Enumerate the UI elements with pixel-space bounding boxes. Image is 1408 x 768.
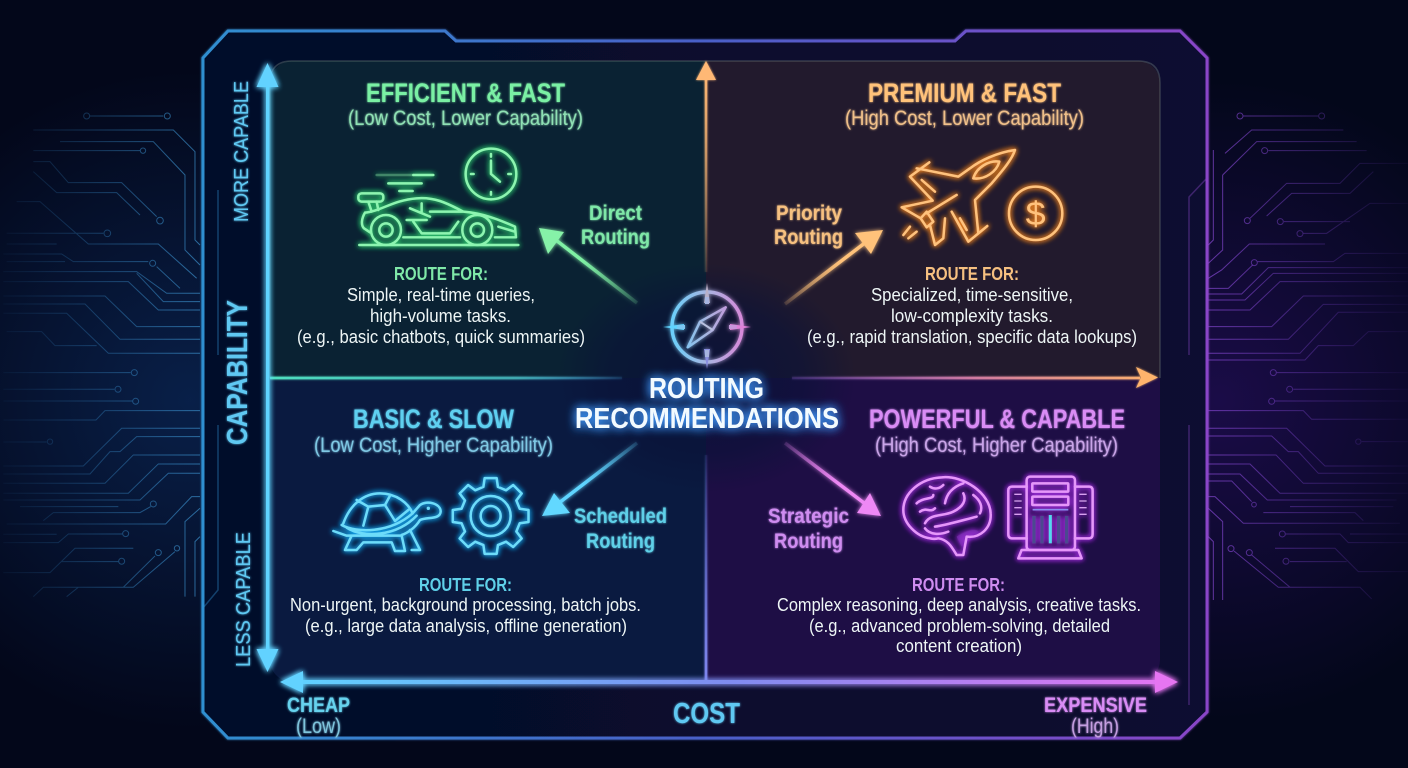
route for text: Simple, real-time queries,: [347, 285, 535, 305]
heading: [845, 78, 1084, 130]
quadrant: basic and slow: [290, 404, 667, 636]
strategic routing label: Routing: [774, 530, 843, 553]
route for text: [777, 575, 1141, 656]
capability axis labels: MORE CAPABLE: [231, 81, 253, 222]
outer frame: [203, 31, 1207, 738]
capability axis labels: [222, 81, 255, 667]
scheduled routing label: Scheduled: [574, 505, 667, 528]
route for text: ROUTE FOR:: [925, 264, 1019, 284]
capability axis arrow: [256, 63, 278, 672]
cost axis labels: CHEAP: [287, 694, 350, 717]
icon: jet and dollar coin: [902, 150, 1062, 245]
heading: EFFICIENT & FAST: [366, 78, 565, 108]
priority routing label: Priority: [776, 202, 842, 225]
route for text: low-complexity tasks.: [891, 306, 1053, 326]
route for text: [290, 575, 641, 636]
direct routing label: Routing: [581, 226, 650, 249]
arrow: priority routing: [785, 230, 883, 304]
arrow: direct routing: [539, 228, 637, 303]
capability axis labels: CAPABILITY: [222, 300, 254, 445]
heading: BASIC & SLOW: [353, 404, 514, 434]
quadrant panel: [270, 61, 1160, 682]
scheduled routing label: [574, 505, 667, 553]
heading: [314, 404, 553, 457]
cost axis labels: (High): [1071, 715, 1119, 738]
priority routing label: Routing: [774, 226, 843, 249]
direct routing label: [581, 202, 650, 249]
route for text: Specialized, time-sensitive,: [871, 285, 1073, 305]
title: [575, 373, 839, 435]
scheduled routing label: Routing: [586, 530, 655, 553]
heading: (Low Cost, Lower Capability): [348, 107, 583, 130]
strategic routing label: [768, 505, 849, 553]
cost axis labels: [287, 694, 1147, 738]
arrow: strategic routing: [785, 443, 881, 516]
heading: (High Cost, Lower Capability): [845, 107, 1084, 130]
route for text: (e.g., advanced problem-solving, detailed: [809, 616, 1110, 636]
route for text: (e.g., large data analysis, offline generation): [305, 616, 627, 636]
heading: [348, 78, 583, 130]
heading: PREMIUM & FAST: [868, 78, 1061, 108]
capability axis labels: LESS CAPABLE: [233, 532, 255, 667]
icon: turtle and gear: [333, 478, 529, 554]
center glow: [556, 263, 856, 493]
priority routing label: [774, 202, 843, 249]
route for text: ROUTE FOR:: [394, 264, 488, 284]
icon: compass: [663, 283, 751, 369]
quadrant: powerful and capable: [768, 404, 1141, 656]
cost axis labels: COST: [673, 698, 740, 730]
route for text: Complex reasoning, deep analysis, creative tasks.: [777, 595, 1141, 615]
route for text: ROUTE FOR:: [419, 575, 512, 595]
title: RECOMMENDATIONS: [575, 403, 839, 435]
icon: brain and server: [903, 477, 1093, 558]
heading: [869, 404, 1125, 457]
heading: (High Cost, Higher Capability): [875, 434, 1118, 457]
title: ROUTING: [649, 373, 764, 405]
arrow: scheduled routing: [542, 443, 637, 516]
route for text: Non-urgent, background processing, batch jobs.: [290, 595, 641, 615]
direct routing label: Direct: [589, 202, 642, 225]
icon: sports car and clock: [358, 149, 518, 245]
strategic routing label: Strategic: [768, 505, 849, 528]
route for text: [297, 264, 585, 347]
circuit pattern right: [1208, 113, 1408, 600]
cost axis labels: EXPENSIVE: [1044, 694, 1147, 717]
route for text: (e.g., rapid translation, specific data lookups): [807, 327, 1137, 347]
cost axis labels: (Low): [296, 715, 341, 738]
route for text: ROUTE FOR:: [912, 575, 1005, 595]
circuit pattern left: [3, 113, 200, 597]
quadrant dividers: [270, 61, 1158, 682]
route for text: (e.g., basic chatbots, quick summaries): [297, 327, 585, 347]
route for text: [807, 264, 1137, 347]
icon: jet and dollar coin: $: [1026, 196, 1046, 233]
quadrant: premium and fast: [774, 78, 1137, 347]
quadrant: efficient and fast: [297, 78, 650, 347]
heading: POWERFUL & CAPABLE: [869, 404, 1125, 434]
route for text: high-volume tasks.: [370, 306, 511, 326]
cost axis arrow: [280, 671, 1178, 693]
route for text: content creation): [896, 636, 1022, 656]
heading: (Low Cost, Higher Capability): [314, 434, 553, 457]
